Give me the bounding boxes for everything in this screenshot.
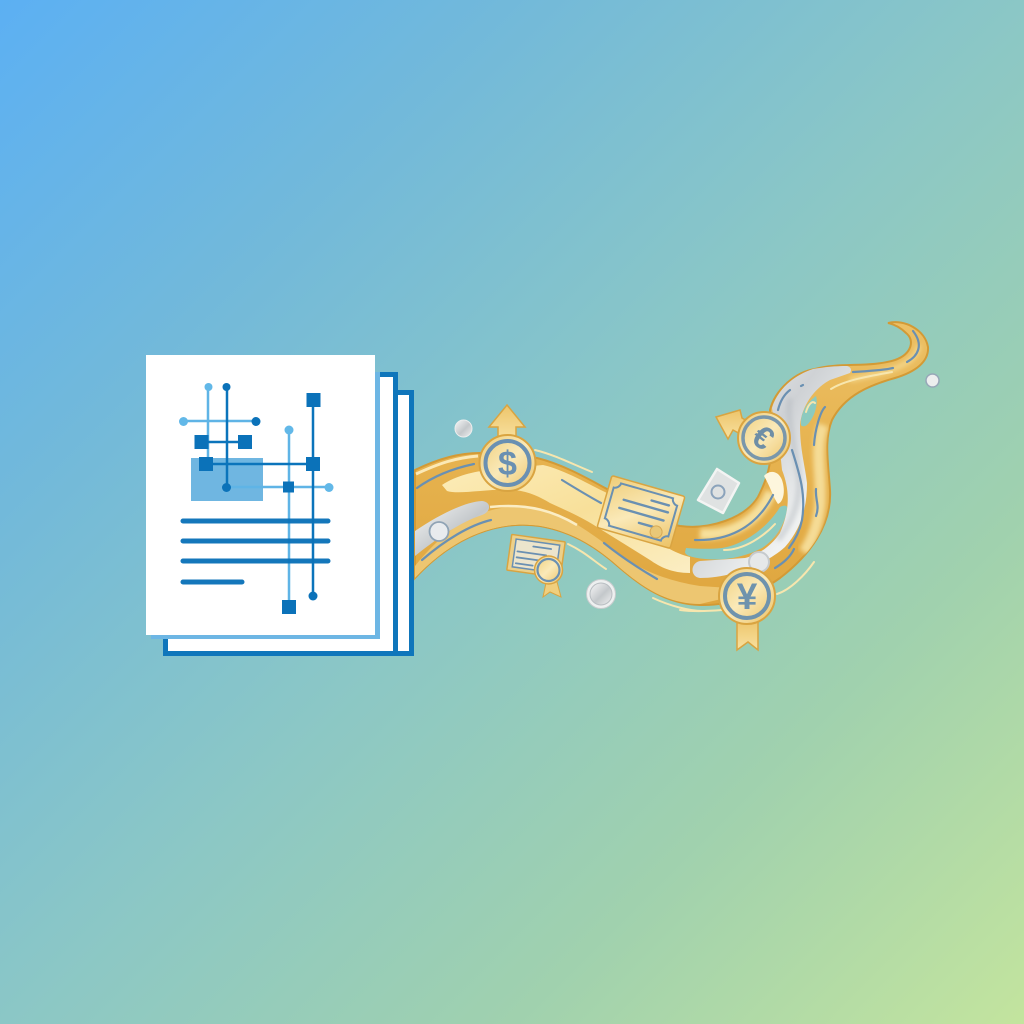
page shadow: [151, 372, 380, 639]
teal gap lower: [685, 506, 787, 560]
medal ribbon: [543, 578, 561, 597]
certificate seal: [649, 525, 664, 539]
icon: dollar medallion: [480, 435, 536, 491]
cream shine line: [490, 506, 577, 525]
icon: silver coin right: [926, 374, 939, 387]
cream accent streaks: [535, 372, 892, 611]
medal: [534, 556, 562, 584]
cream highlight band: [442, 465, 690, 573]
document stack: [146, 355, 412, 654]
icon: silver card: [698, 469, 739, 513]
silver shading: [778, 398, 799, 540]
icon: up arrow: [489, 405, 525, 440]
yen sign: ¥: [737, 576, 758, 617]
top edge shine: [416, 456, 478, 474]
text lines: [183, 521, 328, 582]
back page: [166, 392, 412, 654]
left silver band: [415, 501, 489, 556]
icon: euro arrow: [716, 410, 752, 439]
euro sign: €: [745, 418, 781, 457]
certificate text lines: [617, 492, 670, 530]
icon: large certificate: [597, 476, 685, 548]
icon: silver coin top: [455, 420, 472, 437]
icon: euro medallion: [738, 412, 790, 464]
tail highlight: [850, 345, 919, 380]
clipped ribbon shading: [415, 345, 919, 604]
middle page: [166, 374, 396, 654]
network diagram: [179, 383, 334, 614]
certificate border: [603, 482, 679, 542]
dollar sign: $: [498, 445, 517, 483]
golden ribbon: [415, 322, 928, 611]
icon: silver coin behind yen: [749, 552, 769, 572]
ribbon body: [415, 322, 928, 605]
icon: silver coin on ribbon: [430, 522, 448, 541]
left lower band: [415, 507, 720, 604]
highlighted block: [191, 458, 263, 501]
right strand highlight: [804, 425, 823, 552]
upper return band highlight: [700, 492, 771, 534]
upper band tip: [764, 472, 784, 504]
teal gap upper: [801, 396, 817, 426]
silver band right: [692, 366, 851, 578]
ribbon blue detail lines: [417, 331, 919, 579]
icon: small certificate with medal: [507, 534, 565, 597]
front page: [146, 355, 375, 635]
icon: yen medallion: [719, 568, 775, 624]
icon: yen medal ribbon: [737, 620, 758, 650]
icon: silver coin large: [586, 580, 616, 608]
